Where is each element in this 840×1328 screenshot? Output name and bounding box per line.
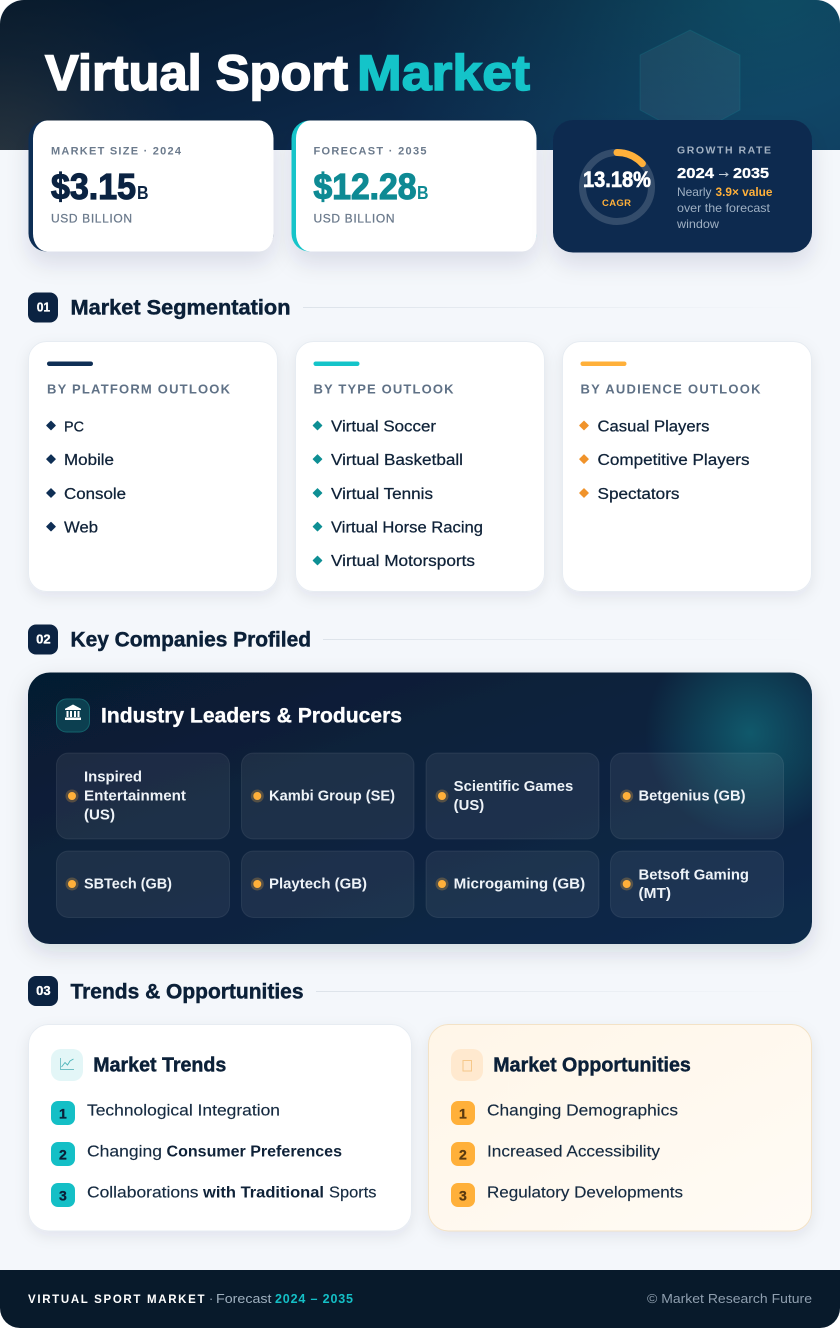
opportunity 3: Regulatory Developments: [487, 1185, 683, 1202]
CAGR ring: [582, 152, 652, 222]
opportunity 2: Increased Accessibility: [487, 1144, 660, 1161]
list: platforms: PC: [64, 420, 84, 436]
opportunity 2: 2: [459, 1146, 467, 1162]
company: Microgaming: Microgaming (GB): [454, 877, 585, 893]
company: Betgenius: Betgenius (GB): [638, 789, 746, 805]
opportunity 1: Changing Demographics: [487, 1103, 678, 1120]
label: FORECAST · 2035: [314, 146, 426, 158]
growth note: over the forecast: [677, 201, 771, 215]
company: Betsoft Gaming: Betsoft Gaming: [638, 867, 749, 883]
unit: USD BILLION: [314, 212, 394, 226]
footer title: Forecast: [216, 1292, 272, 1306]
trend 2: 2: [59, 1146, 67, 1162]
label: MARKET SIZE · 2024: [51, 146, 182, 158]
stat card: forecast 2035: [292, 120, 536, 252]
trend 1: 1: [59, 1105, 67, 1121]
icon: chart: [51, 1049, 83, 1081]
list: types: Virtual Basketball: [331, 452, 463, 469]
CAGR ring: 13.18%: [583, 167, 651, 192]
opportunities heading: Market Opportunities: [493, 1055, 691, 1077]
title: [45, 45, 530, 101]
value: B: [137, 183, 148, 203]
header banner: [0, 0, 840, 150]
trends heading: Market Trends: [93, 1055, 226, 1077]
section heading 03: Trends & Opportunities: [70, 980, 304, 1004]
list: platforms: Console: [64, 486, 126, 503]
panel: market trends: [28, 1024, 412, 1231]
opportunity 3: [451, 1183, 683, 1207]
footer credit: © Market Research Future: [647, 1292, 812, 1306]
panel: by type outlook: BY TYPE OUTLOOK: [314, 382, 454, 396]
panel: industry leaders: [28, 672, 812, 944]
company: Scientific Games: [426, 753, 599, 839]
company: Inspired Entertainment: Inspired: [84, 770, 142, 786]
footer title: VIRTUAL SPORT MARKET: [28, 1294, 204, 1306]
company: SBTech: [56, 851, 230, 918]
footer title: 2024 – 2035: [275, 1292, 353, 1306]
growth rate card: [553, 120, 812, 252]
company: Playtech: [242, 851, 414, 918]
opportunity 1: [451, 1101, 678, 1125]
section heading 01: 01: [37, 300, 50, 315]
list: types: [313, 418, 483, 570]
section heading 01: [28, 292, 812, 322]
list: types: Virtual Tennis: [331, 486, 433, 503]
trend 3: [51, 1183, 376, 1207]
growth note: [676, 185, 773, 231]
value: $3.15: [51, 166, 136, 207]
opportunity 3: 3: [459, 1187, 467, 1203]
list: audiences: Competitive Players: [598, 452, 750, 469]
footer title: ·: [209, 1292, 213, 1306]
list: types: Virtual Motorsports: [331, 553, 475, 570]
value: $12.28: [314, 166, 416, 207]
list: types: Virtual Soccer: [331, 418, 436, 436]
list: platforms: Mobile: [64, 452, 114, 469]
footer title: [28, 1292, 353, 1306]
panel: by platform outlook: BY PLATFORM OUTLOOK: [47, 382, 231, 396]
company: Kambi Group: [242, 753, 414, 839]
trend 3: Collaborations: [87, 1185, 198, 1202]
growth note: window: [676, 217, 719, 231]
panel heading: Industry Leaders & Producers: [101, 705, 402, 728]
CAGR ring: CAGR: [602, 198, 631, 209]
company: Scientific Games: (US): [454, 798, 484, 814]
trend 3: with Traditional: [202, 1185, 324, 1202]
trend 2: Consumer Preferences: [166, 1144, 342, 1161]
panel: market opportunities: [428, 1024, 812, 1231]
trend 1: Technological Integration: [87, 1103, 280, 1120]
company: Betgenius: [610, 753, 784, 839]
company: Microgaming: [426, 851, 599, 918]
company: Kambi Group: Kambi Group (SE): [269, 789, 395, 805]
trend 2: [51, 1142, 342, 1166]
list: audiences: Spectators: [598, 486, 680, 503]
list: types: Virtual Horse Racing: [331, 519, 483, 536]
list: audiences: Casual Players: [598, 418, 710, 436]
trend 3: Sports: [329, 1185, 376, 1202]
panel: by audience outlook: BY AUDIENCE OUTLOOK: [580, 382, 761, 396]
growth note: 3.9× value: [716, 185, 773, 199]
opportunity 2: [451, 1142, 660, 1166]
company: Betsoft Gaming: [610, 851, 784, 918]
company: Inspired Entertainment: Entertainment: [84, 789, 186, 805]
list: platforms: Web: [64, 519, 98, 536]
section heading 02: 02: [36, 632, 51, 647]
panel: by audience outlook: [562, 342, 812, 592]
value: B: [417, 183, 428, 203]
unit: USD BILLION: [51, 212, 132, 226]
company: Inspired Entertainment: [56, 753, 230, 839]
panel: by platform outlook: [28, 342, 278, 592]
growth rate label: GROWTH RATE: [677, 144, 771, 156]
section heading 02: [28, 624, 812, 654]
section heading 01: Market Segmentation: [70, 296, 290, 320]
trend 3: 3: [59, 1187, 67, 1203]
stat card: market size 2024: [28, 120, 274, 252]
title: Market: [357, 45, 530, 101]
company: Betsoft Gaming: (MT): [638, 886, 671, 902]
company: Scientific Games: Scientific Games: [454, 779, 573, 795]
footer: [0, 1270, 840, 1328]
company: Inspired Entertainment: (US): [84, 808, 115, 824]
list: platforms: [47, 420, 126, 536]
icon: opportunity placeholder: [451, 1049, 483, 1081]
company: Playtech: Playtech (GB): [269, 877, 367, 893]
growth note: Nearly: [677, 185, 712, 199]
years range: 2035: [733, 165, 769, 182]
section heading 03: [28, 976, 812, 1006]
years range: 2024: [677, 165, 715, 182]
trend 2: Changing: [87, 1144, 162, 1161]
company: SBTech: SBTech (GB): [84, 877, 172, 893]
panel: by type outlook: [296, 342, 544, 592]
years range: [677, 165, 769, 182]
title: Virtual Sport: [45, 45, 348, 101]
icon: decorative hexagon: [640, 30, 740, 120]
section heading 03: 03: [36, 983, 51, 998]
section heading 02: Key Companies Profiled: [70, 628, 311, 652]
icon: institution building: [56, 699, 90, 732]
trend 1: [51, 1101, 280, 1125]
opportunity 1: 1: [459, 1105, 467, 1121]
list: audiences: [580, 418, 750, 503]
